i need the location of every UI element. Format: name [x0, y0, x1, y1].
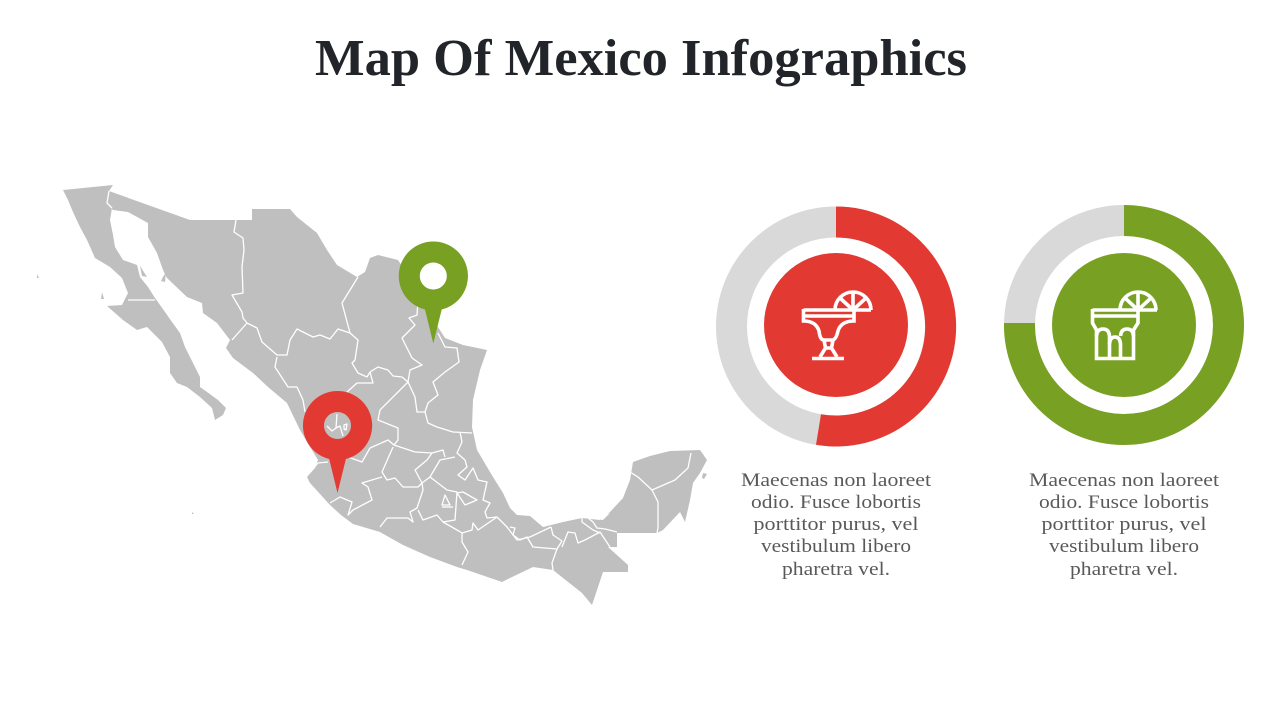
- inner disc: [764, 253, 908, 397]
- text block: left: porttitor purus, vel: [754, 514, 918, 535]
- panel: red donut: [732, 206, 956, 446]
- panel: green donut: [1004, 205, 1244, 445]
- donut track: [732, 222, 940, 431]
- text block: right: Maecenas non laoreet: [1029, 470, 1220, 491]
- pin: red: [303, 391, 372, 493]
- donut track: [1020, 220, 1228, 430]
- inner disc: [1052, 253, 1196, 397]
- text block: right: [1029, 470, 1220, 580]
- icon: margarita: [804, 292, 871, 358]
- text block: left: odio. Fusce lobortis: [751, 492, 921, 513]
- map: land areas: [37, 185, 707, 605]
- donut value arc: [816, 206, 956, 446]
- text block: left: vestibulum libero: [761, 536, 911, 557]
- map: state borders: [107, 191, 691, 570]
- icon: cocktail glass: [1092, 292, 1157, 358]
- text block: left: [741, 470, 932, 580]
- text block: right: porttitor purus, vel: [1042, 514, 1206, 535]
- text block: right: vestibulum libero: [1049, 536, 1199, 557]
- text block: left: pharetra vel.: [782, 559, 890, 580]
- map: lagoon: [592, 513, 610, 520]
- text block: left: Maecenas non laoreet: [741, 470, 932, 491]
- map of Mexico: [37, 185, 707, 605]
- pin: green: [399, 241, 468, 344]
- title: Map Of Mexico Infographics: [315, 30, 967, 87]
- text block: right: pharetra vel.: [1070, 559, 1178, 580]
- text block: right: odio. Fusce lobortis: [1039, 492, 1209, 513]
- donut value arc: [1004, 205, 1244, 445]
